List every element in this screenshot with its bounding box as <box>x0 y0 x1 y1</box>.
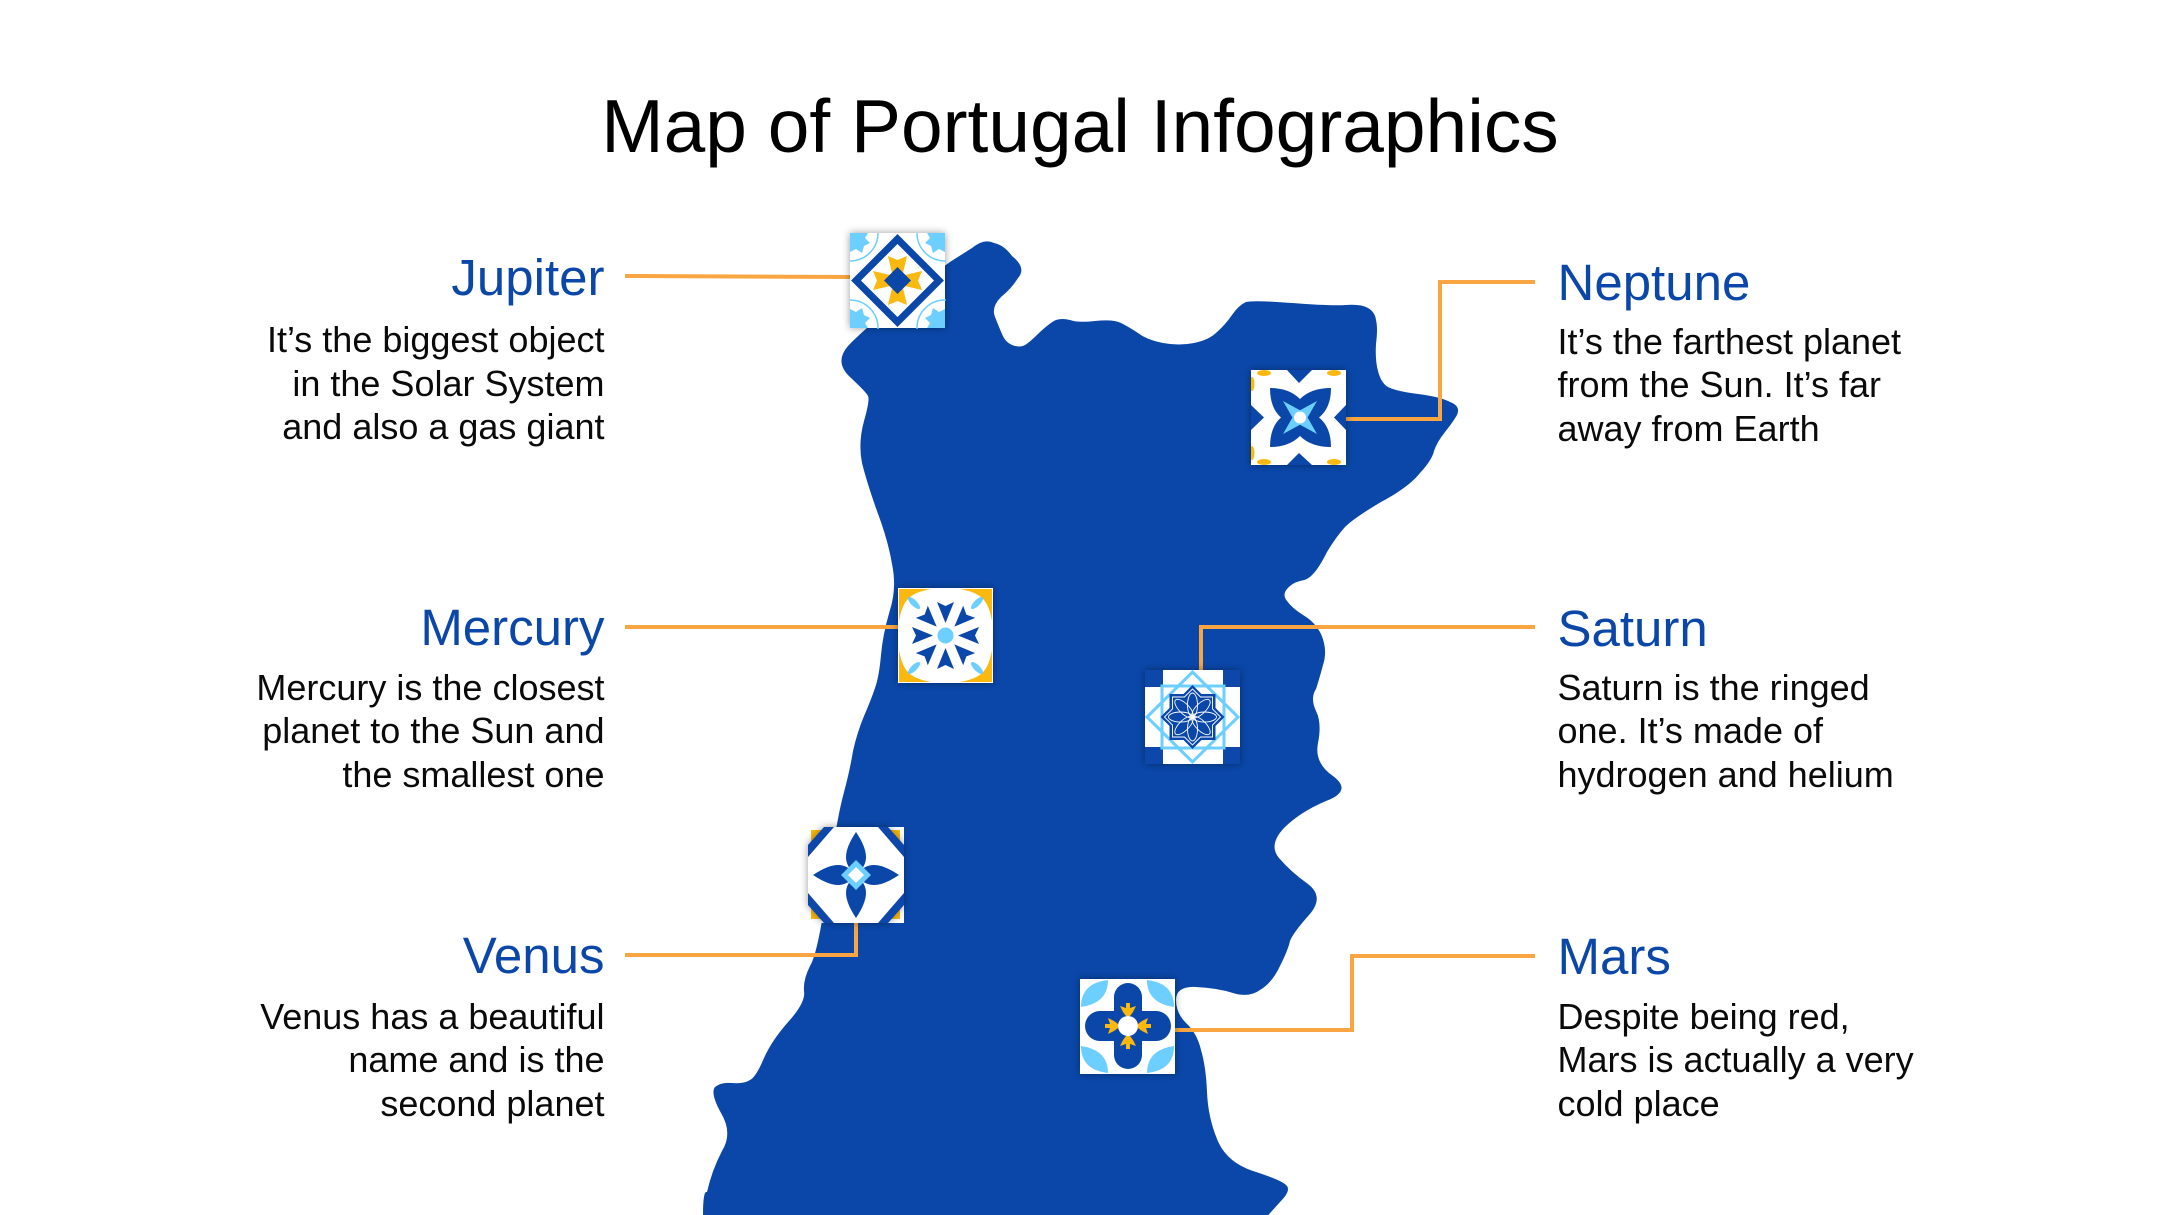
connector: Neptune <box>1346 282 1535 419</box>
text block: Mars: Mars is actually a very <box>1558 1039 1914 1080</box>
text block: Jupiter: Jupiter <box>451 249 605 306</box>
text block: Mercury: Mercury <box>420 599 605 656</box>
text block: Neptune <box>1558 254 1901 449</box>
tile: Jupiter <box>844 228 950 334</box>
text block: Mars: Mars <box>1558 928 1671 985</box>
text block: Venus <box>260 927 604 1124</box>
connector: Saturn <box>1201 627 1535 670</box>
connector: Jupiter <box>625 276 850 277</box>
text block: Saturn: Saturn <box>1558 600 1708 657</box>
text block: Mercury: the smallest one <box>342 754 604 795</box>
tile: Mercury <box>898 588 993 683</box>
connector: Mars <box>1175 956 1535 1030</box>
text block: Jupiter: It’s the biggest object <box>267 319 604 360</box>
text block: Saturn: Saturn is the ringed <box>1558 667 1870 708</box>
text block: Mars <box>1558 928 1914 1124</box>
text block: Neptune: It’s the farthest planet <box>1558 321 1901 362</box>
text block: Neptune: from the Sun. It’s far <box>1558 364 1881 405</box>
text block: Saturn: hydrogen and helium <box>1558 754 1894 795</box>
text block: Venus: Venus <box>463 927 604 984</box>
connector: Mercury <box>625 625 898 629</box>
connector: Venus <box>625 923 856 955</box>
tile: Venus <box>808 827 904 923</box>
text block: Saturn <box>1558 600 1894 795</box>
text block: Venus: name and is the <box>348 1039 604 1080</box>
tile: Neptune <box>1250 370 1346 465</box>
tile: Mars <box>1080 979 1175 1074</box>
text block: Mars: cold place <box>1558 1083 1720 1124</box>
text block: Mercury <box>256 599 605 795</box>
text block: Saturn: one. It’s made of <box>1558 710 1824 751</box>
text block: Mercury: planet to the Sun and <box>262 710 604 751</box>
text block: Mercury: Mercury is the closest <box>256 667 604 708</box>
text block: Venus: Venus has a beautiful <box>260 996 604 1037</box>
text block: Mars: Despite being red, <box>1558 996 1850 1037</box>
text block: Neptune: Neptune <box>1558 254 1750 311</box>
text block: Neptune: away from Earth <box>1558 408 1820 449</box>
tile: Saturn <box>1145 670 1240 764</box>
title: Map of Portugal Infographics <box>601 84 1559 168</box>
map of Portugal <box>703 241 1458 1215</box>
text block: Venus: second planet <box>380 1083 604 1124</box>
text block: Jupiter: and also a gas giant <box>282 406 604 447</box>
text block: Jupiter <box>267 249 605 447</box>
text block: Jupiter: in the Solar System <box>292 363 604 404</box>
